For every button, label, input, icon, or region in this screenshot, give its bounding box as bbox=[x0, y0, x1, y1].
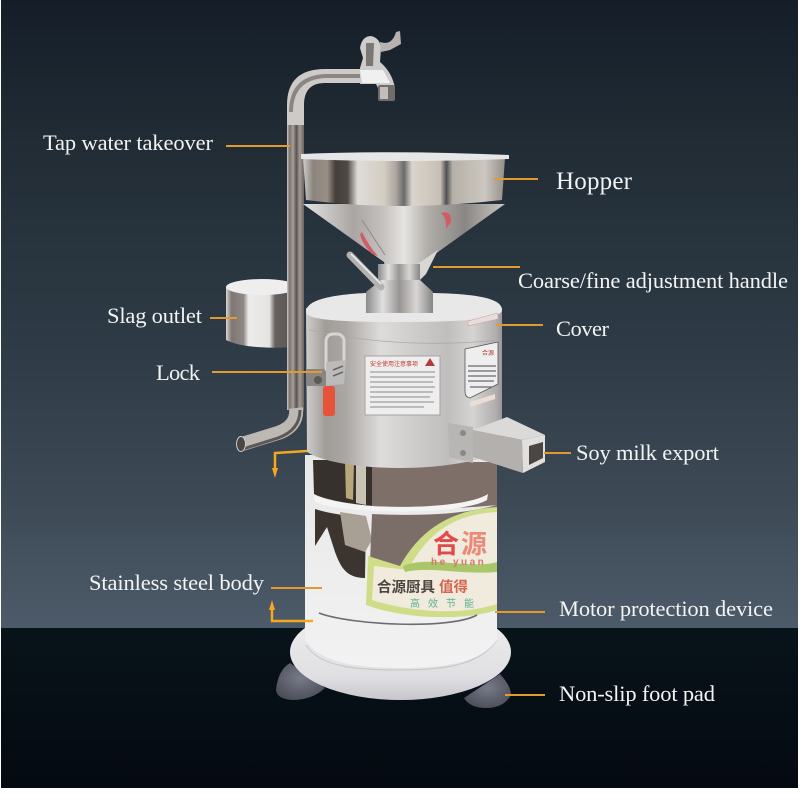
label: cover: Cover bbox=[556, 316, 610, 341]
water pipe with elbow and outlet bbox=[236, 69, 362, 452]
water tap bbox=[360, 31, 401, 101]
hopper cylinder bbox=[303, 158, 505, 206]
coarse/fine adjustment handle and neck bbox=[350, 254, 433, 310]
label text: small: 高效节能 bbox=[410, 597, 482, 610]
warning label bbox=[365, 356, 440, 415]
background wall bbox=[1, 0, 798, 628]
reflection: upper brown band bbox=[370, 462, 497, 509]
slag outlet bbox=[226, 279, 298, 348]
reflection: upper left dark bbox=[313, 460, 372, 506]
reflection: lower left dark bbox=[315, 509, 366, 578]
label text: pinyin: he yuan bbox=[431, 557, 486, 568]
foot pad: right bbox=[464, 674, 511, 708]
spec plate bbox=[465, 342, 498, 398]
label: hopper: Hopper bbox=[556, 168, 633, 195]
label text: slogan: 合源厨具 值得 bbox=[377, 578, 468, 596]
foot pad: left bbox=[276, 663, 325, 700]
label: slag outlet: Slag outlet bbox=[107, 303, 203, 328]
callout arrow: cover range bbox=[272, 451, 307, 478]
label: motor protection device: Motor protection device bbox=[559, 596, 773, 621]
label: coarse/fine adjustment handle: Coarse/fine adjustment handle bbox=[518, 268, 788, 293]
background floor bbox=[1, 628, 798, 788]
hopper cone bbox=[303, 204, 505, 272]
stainless steel body bbox=[305, 455, 497, 668]
body band: lower slot bbox=[319, 613, 477, 624]
hopper rim bbox=[301, 152, 509, 161]
warning label: 安全使用注意事项 bbox=[370, 360, 418, 368]
reflection: lower brown band bbox=[370, 505, 497, 568]
label text: brand: 合源 bbox=[433, 529, 487, 559]
label: soy milk export: Soy milk export bbox=[576, 440, 720, 465]
label: non-slip foot pad: Non-slip foot pad bbox=[559, 681, 715, 706]
leader lines bbox=[210, 146, 571, 695]
label: lock: Lock bbox=[156, 360, 201, 385]
label: stainless steel body: Stainless steel body bbox=[89, 570, 265, 595]
small red sticker bbox=[470, 394, 495, 407]
lock bbox=[307, 334, 346, 416]
spec plate: 合源 bbox=[482, 349, 494, 357]
cover bbox=[306, 293, 502, 468]
body band: top slot bbox=[314, 494, 488, 512]
soy milk spout bbox=[448, 417, 545, 473]
body label bbox=[366, 507, 497, 617]
label: tap water takeover: Tap water takeover bbox=[43, 130, 214, 155]
callout arrow: body range bbox=[269, 600, 313, 621]
base plate bbox=[290, 604, 511, 700]
hopper bbox=[301, 152, 509, 280]
machine: soy milk grinder bbox=[226, 31, 545, 708]
